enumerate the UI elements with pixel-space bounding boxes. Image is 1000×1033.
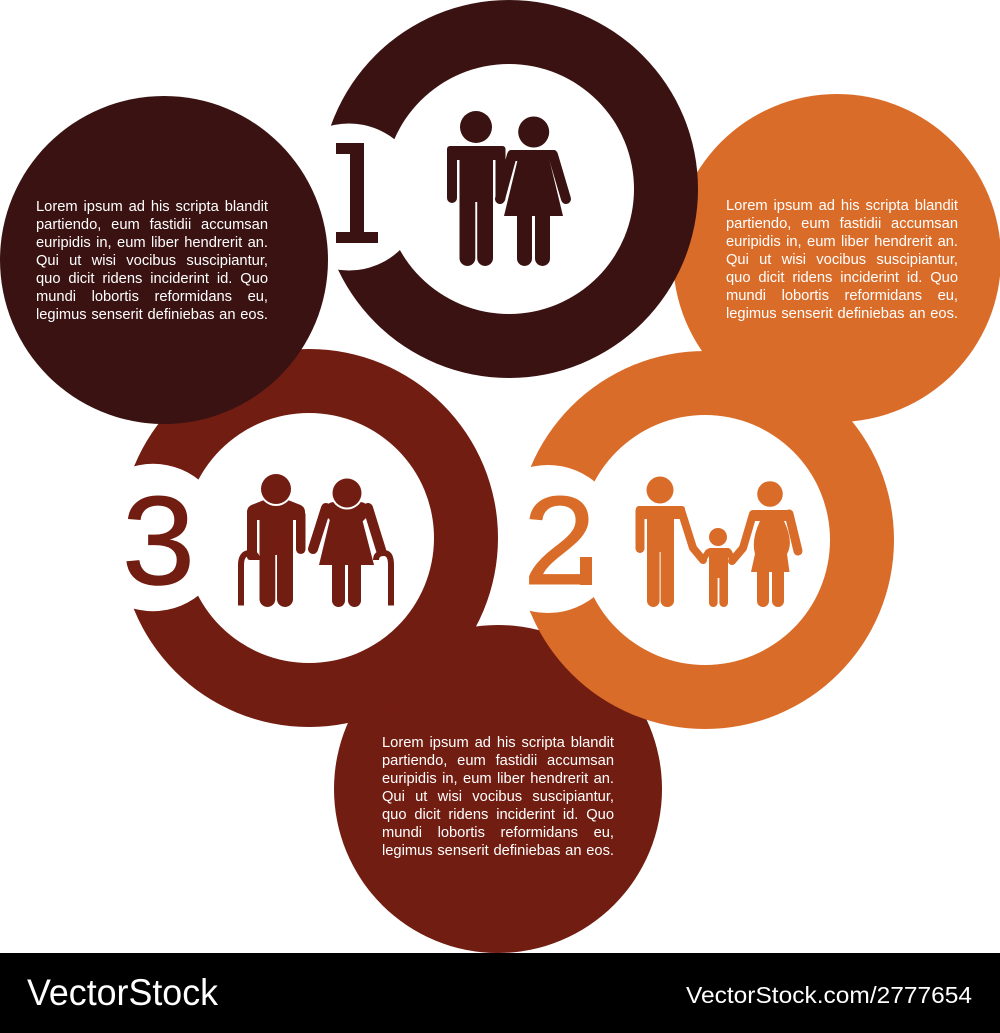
text block: brown circle: euripidis in, eum liber hendrerit an.: [382, 771, 614, 787]
text block: dark circle: Qui ut wisi vocibus suscipiantur,: [36, 253, 268, 269]
text block: brown circle: [382, 735, 614, 859]
panel: brown text circle: [334, 625, 662, 953]
number 2: 2: [523, 470, 596, 611]
number 1: [336, 127, 378, 286]
text block: dark circle: legimus senserit definiebas an eos.: [36, 307, 268, 323]
text block: brown circle: partiendo, eum fastidii accumsan: [382, 753, 614, 769]
text block: orange circle: quo dicit ridens inciderint id. Quo: [726, 270, 958, 286]
text block: dark circle: euripidis in, eum liber hendrerit an.: [36, 235, 268, 251]
text block: dark circle: mundi lobortis reformidans eu,: [36, 289, 268, 305]
text block: orange circle: Qui ut wisi vocibus suscipiantur,: [726, 252, 958, 268]
footer logo: VectorStock: [27, 972, 218, 1013]
text block: dark circle: partiendo, eum fastidii accumsan: [36, 217, 268, 233]
text block: orange circle: mundi lobortis reformidans eu,: [726, 288, 958, 304]
text block: dark circle: [36, 199, 268, 323]
icon: elderly couple: [241, 472, 391, 607]
text block: brown circle: quo dicit ridens inciderint id. Quo: [382, 807, 614, 823]
text block: orange circle: Lorem ipsum ad his scripta blandit: [726, 198, 958, 214]
text block: brown circle: Lorem ipsum ad his scripta blandit: [382, 735, 614, 751]
icon: couple: [447, 111, 566, 266]
text block: brown circle: legimus senserit definiebas an eos.: [382, 843, 614, 859]
text block: brown circle: Qui ut wisi vocibus suscipiantur,: [382, 789, 614, 805]
text block: orange circle: partiendo, eum fastidii accumsan: [726, 216, 958, 232]
footer image id: VectorStock.com/2777654: [686, 982, 972, 1008]
text block: orange circle: [726, 198, 958, 322]
icon: family: [636, 476, 798, 607]
ring 1: dark: [276, 0, 698, 378]
panel: dark text circle: [0, 96, 328, 424]
text block: dark circle: quo dicit ridens inciderint id. Quo: [36, 271, 268, 287]
text block: orange circle: legimus senserit definiebas an eos.: [726, 306, 958, 322]
ring 1: dark: 1: [349, 127, 367, 286]
ring 3: brown: [79, 349, 498, 727]
ring 2: orange: [474, 351, 894, 729]
text block: orange circle: euripidis in, eum liber hendrerit an.: [726, 234, 958, 250]
text block: dark circle: Lorem ipsum ad his scripta blandit: [36, 199, 268, 215]
panel: orange text circle: [673, 94, 1000, 422]
footer bar: [0, 953, 1000, 1033]
text block: brown circle: mundi lobortis reformidans eu,: [382, 825, 614, 841]
number 3: 3: [122, 470, 195, 611]
